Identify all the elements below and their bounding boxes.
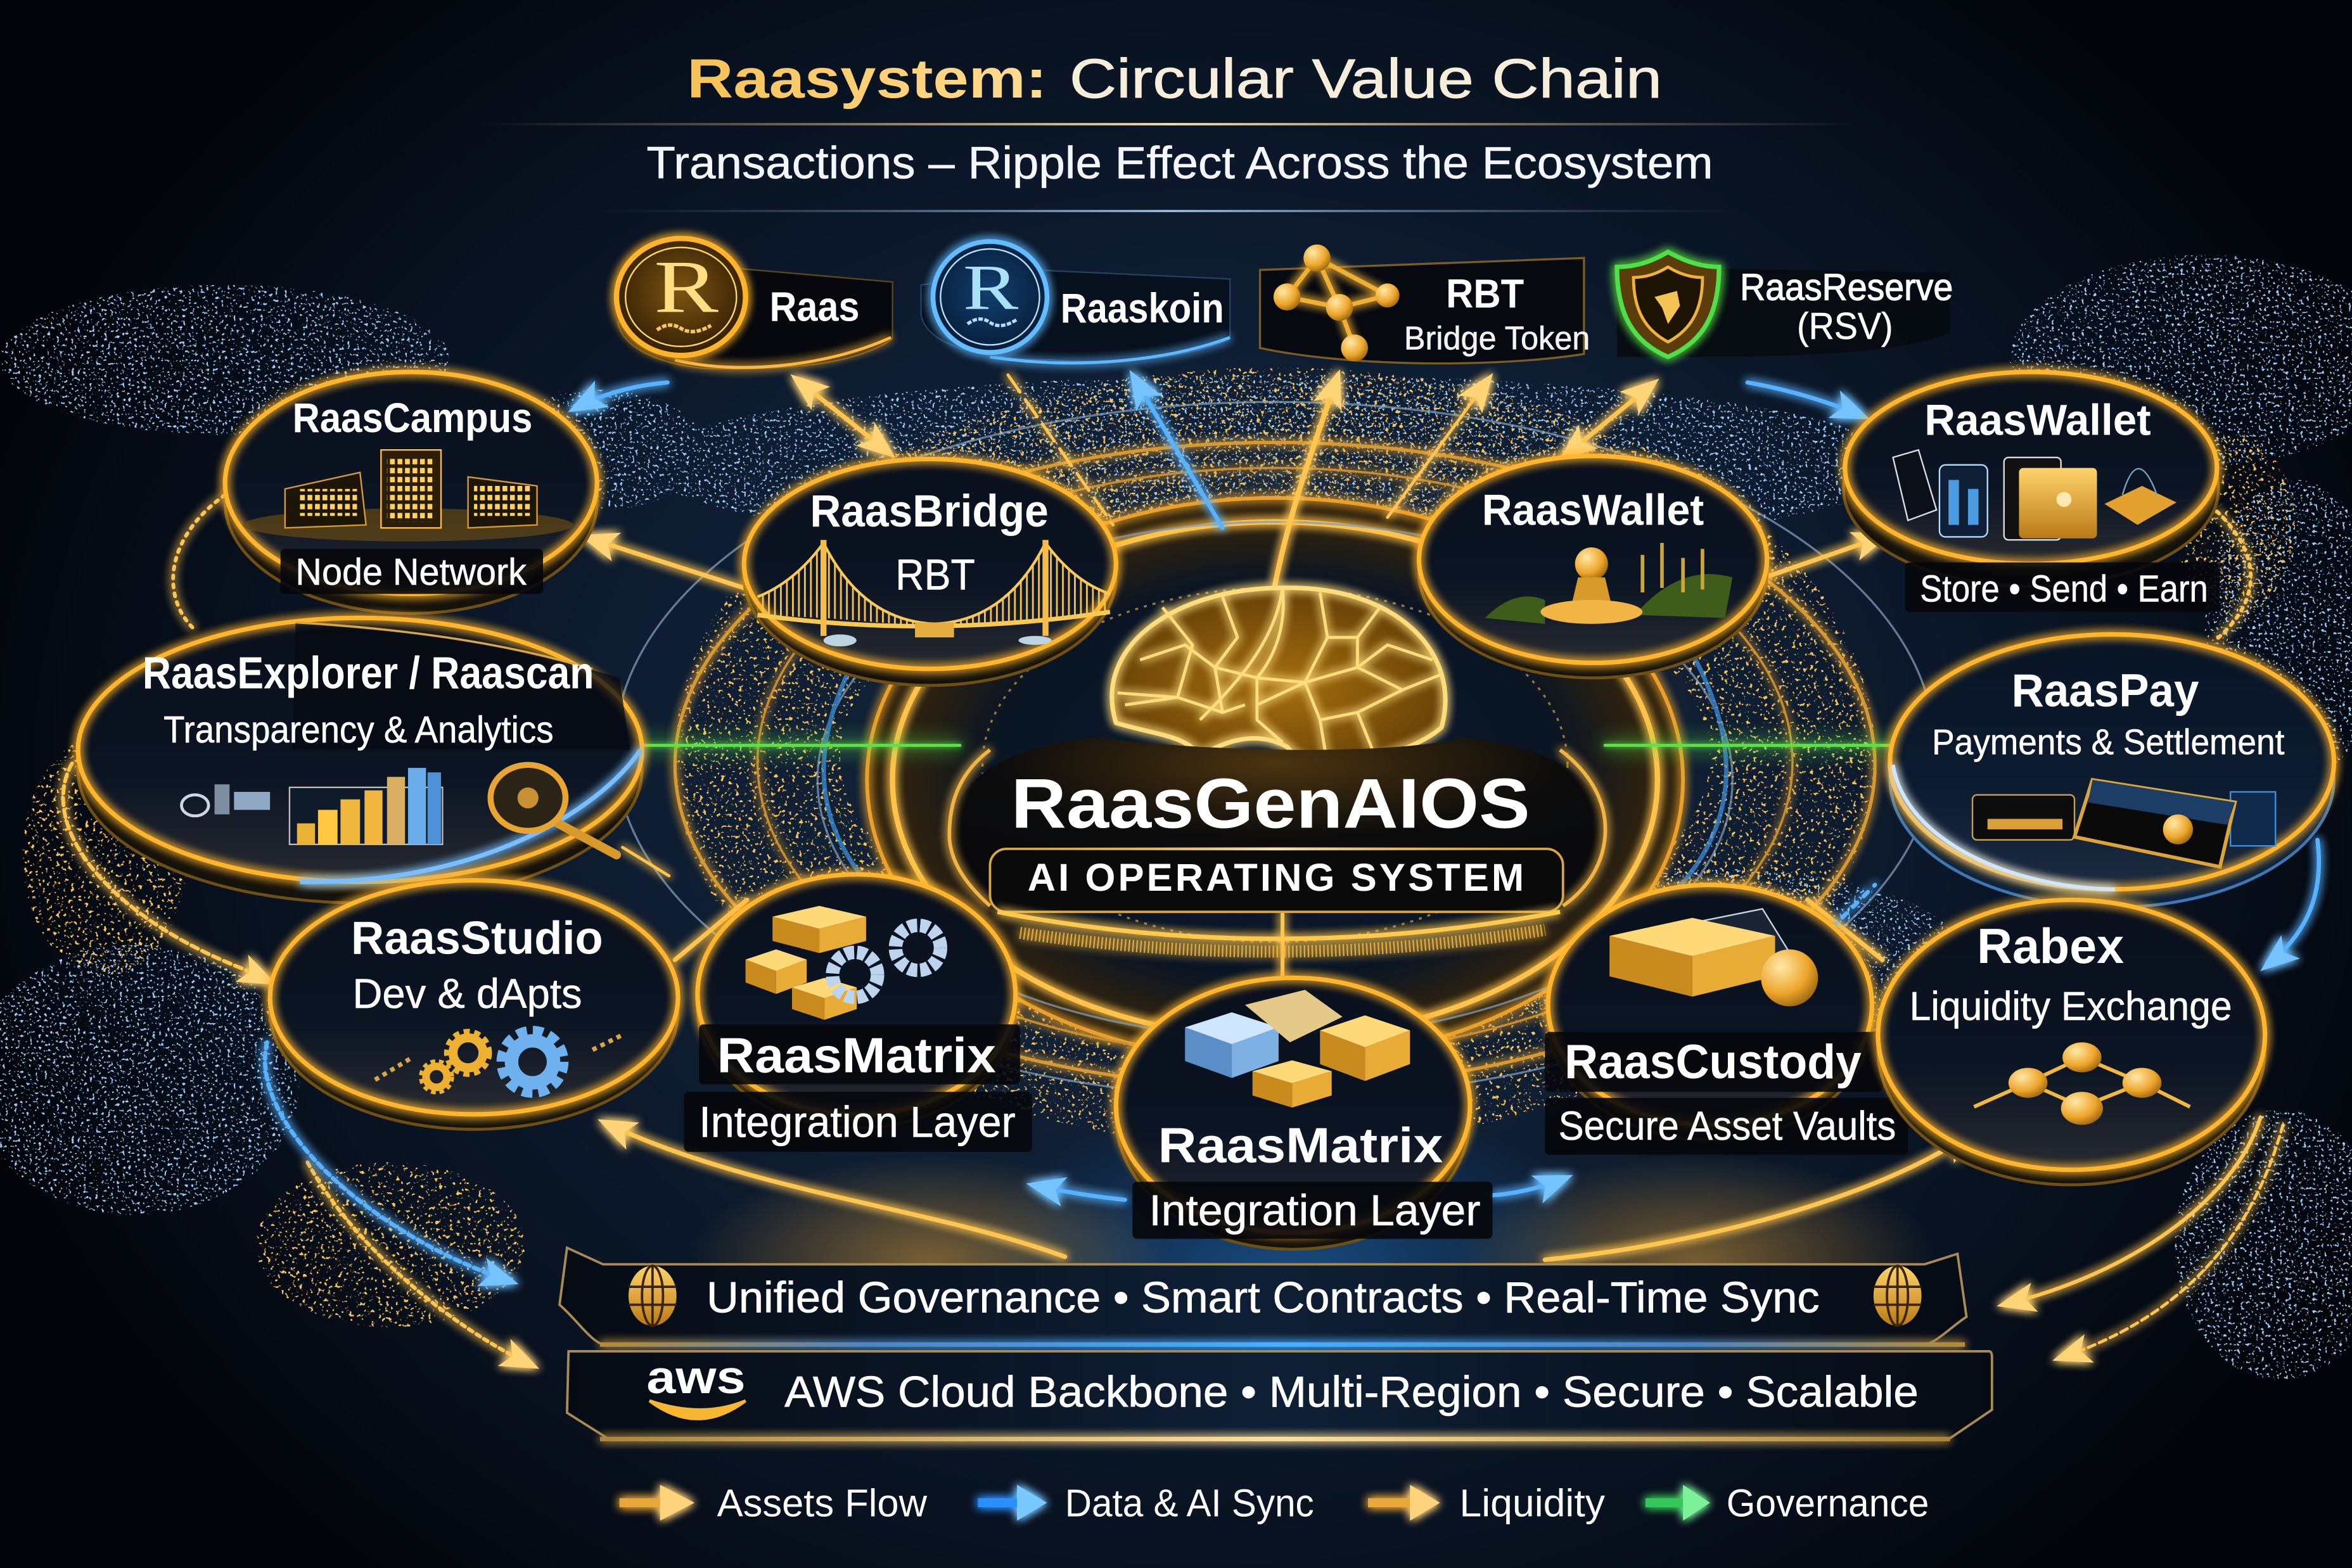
heading: RaasStudio [351, 912, 603, 964]
flow arrows [63, 375, 2319, 1367]
legend: assets flow [620, 1481, 928, 1525]
token: RaasReserve [1617, 252, 1953, 357]
token: Raaskoin [921, 241, 1230, 363]
icon: gold R coin [617, 238, 746, 355]
label plate: Integration Layer: Integration Layer [1149, 1186, 1481, 1235]
icon: suspension bridge [758, 540, 1110, 646]
icon: blue R coin: R [963, 252, 1019, 324]
node: RaasCampus [225, 372, 597, 613]
legend: governance: Governance [1727, 1481, 1929, 1525]
node: RaasCustody [1545, 885, 1908, 1155]
gold waveform [997, 912, 1560, 952]
title: Circular Value Chain [1070, 48, 1662, 110]
node: Rabex [1878, 900, 2265, 1185]
icon: magnifier [490, 765, 617, 855]
arrows: token and node connections [63, 375, 2283, 1367]
icon: blue R coin [933, 241, 1047, 352]
arrows: data and AI sync [265, 375, 2319, 1282]
arrows: governance [630, 745, 1905, 746]
panel: governance band [559, 1248, 1967, 1347]
legend: data and AI sync: Data & AI Sync [1065, 1481, 1314, 1525]
icon: shield [1617, 252, 1719, 357]
node: RaasMatrix left [684, 874, 1032, 1152]
panel: AWS cloud band [567, 1351, 1992, 1441]
label plate: store, send, earn: Store • Send • Earn [1920, 567, 2208, 609]
panel: center title plate [949, 738, 1606, 909]
heading: RaasPay [2012, 665, 2199, 717]
logo: AWS [646, 1351, 746, 1418]
icon: wallet, phone, card set [1893, 450, 2176, 540]
node: RaasExplorer / Raascan [78, 618, 642, 903]
panel: AI operating system: AI OPERATING SYSTEM [1028, 856, 1524, 900]
title: Raasystem: [687, 48, 1047, 110]
panel: AI operating system [990, 848, 1563, 912]
icon: analytics objects [181, 784, 270, 816]
subheading: Transparency & Analytics [163, 708, 554, 751]
bar chart [290, 768, 442, 845]
heading: RaasWallet [1924, 396, 2151, 445]
legend: governance [1646, 1481, 1929, 1525]
label plate: Secure Asset Vaults: Secure Asset Vaults [1559, 1103, 1896, 1149]
subheading: Liquidity Exchange [1910, 983, 2232, 1029]
icon: blocks and gears [746, 906, 940, 1020]
node: RaasPay [1890, 634, 2334, 907]
legend: liquidity [1368, 1481, 1605, 1525]
icon: left globe [629, 1266, 677, 1326]
legend: assets flow: Assets Flow [717, 1481, 928, 1525]
icon: right globe [1874, 1266, 1922, 1326]
icon: token network [1274, 245, 1400, 362]
node: RaasWallet centre [1419, 456, 1767, 678]
heading: RaasCampus [293, 395, 532, 442]
icon: payment cards [1972, 780, 2275, 867]
label: Raas [769, 284, 860, 331]
heading: RaasMatrix [1158, 1118, 1443, 1173]
node: RaasBridge [744, 459, 1116, 685]
node: RaasStudio [270, 881, 678, 1130]
label plate: Node Network: Node Network [295, 551, 527, 593]
title [687, 48, 1662, 110]
label plate: RaasCustody: RaasCustody [1564, 1035, 1862, 1089]
node: RaasWallet right [1843, 372, 2220, 612]
logo: AWS: aws [646, 1351, 746, 1403]
sublabel: Bridge Token [1404, 321, 1590, 357]
icon: campus buildings [243, 450, 573, 542]
subheading: Dev & dApts [352, 971, 582, 1017]
heading: RaasWallet [1482, 486, 1704, 535]
icon: liquidity nodes [1974, 1042, 2190, 1125]
label plate: Integration Layer: Integration Layer [699, 1097, 1016, 1146]
band text: AWS Cloud Backbone • Multi-Region • Secure • Scalable [784, 1368, 1919, 1417]
subheading: Payments & Settlement [1932, 723, 2285, 763]
heading: RaasBridge [810, 487, 1049, 537]
icon: gold pedestal and foliage [1485, 543, 1732, 624]
label: RaasReserve [1740, 265, 1953, 308]
band text: Unified Governance • Smart Contracts • Real-Time Sync [706, 1273, 1820, 1322]
heading: Rabex [1977, 918, 2124, 974]
legend: liquidity: Liquidity [1459, 1481, 1605, 1525]
label: RBT [1446, 271, 1524, 316]
subtitle: Transactions – Ripple Effect Across the Ecosystem [646, 139, 1713, 189]
token: Raas [617, 238, 893, 369]
label: Raaskoin [1061, 285, 1224, 332]
center: RaasGenAIOS [949, 588, 1606, 952]
icon: neural brain [1112, 588, 1445, 765]
icon: gold vaults [1609, 909, 1818, 1006]
token: RBT Bridge Token [1260, 245, 1590, 364]
title: RaasGenAIOS: RaasGenAIOS [1011, 764, 1530, 843]
heading: RaasExplorer / Raascan [143, 649, 594, 699]
node: RaasMatrix centre [1116, 978, 1492, 1249]
subheading: RBT [895, 550, 975, 599]
legend [620, 1481, 1929, 1525]
orbital rings [615, 402, 1935, 1098]
label plate: RaasMatrix: RaasMatrix [717, 1028, 996, 1083]
icon: gold and blue blocks [1185, 990, 1410, 1107]
icon: gears [375, 1030, 622, 1093]
icon: gold R coin: R [654, 245, 719, 328]
sublabel: (RSV) [1797, 305, 1893, 347]
